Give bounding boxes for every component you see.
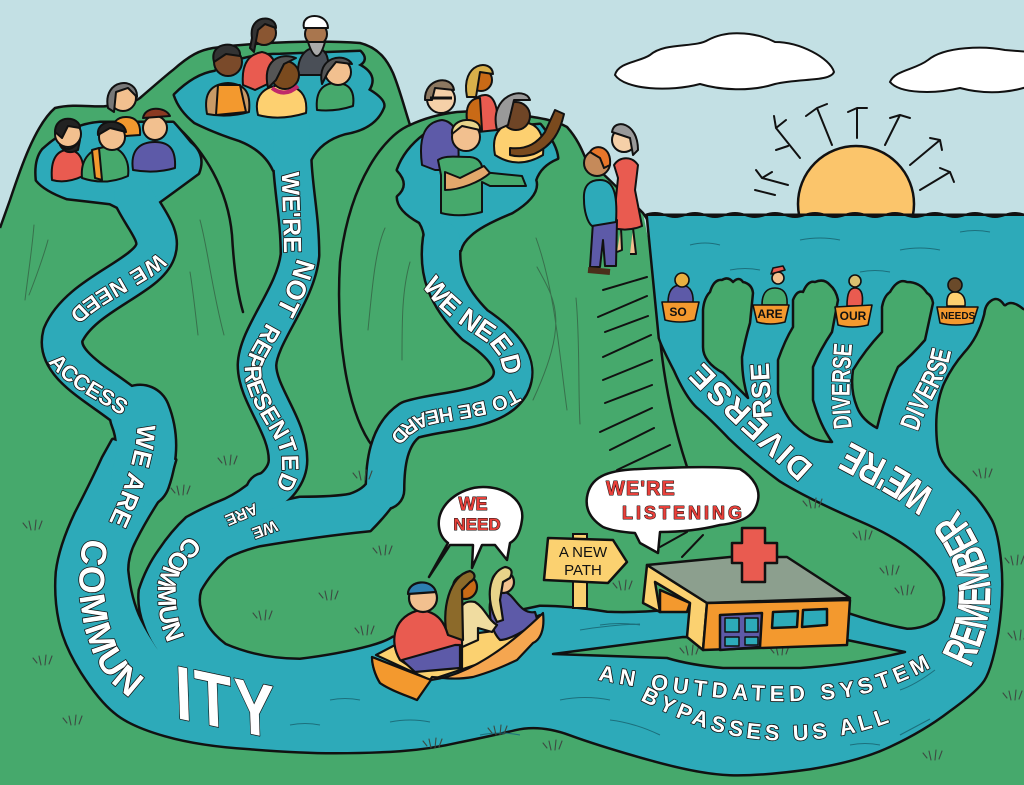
river text: we're not represented, we are community: WE (250, 520, 280, 540)
sun rays: raised-arm figures (755, 104, 954, 195)
river text: we need to be heard: TO BE HEARD (392, 390, 522, 444)
speech bubble: we need: NEED (453, 515, 501, 534)
ladder on cliff (598, 277, 703, 557)
sea sign labels (669, 305, 976, 323)
river text: remember we're diverse: DIVERSE (688, 362, 814, 482)
hill crease lines (25, 123, 580, 447)
finger labels: diverse: RSE (749, 362, 773, 418)
speech bubble: we need: WE (458, 494, 488, 514)
sea sign labels: NEEDS (941, 311, 976, 322)
sea sign labels: ARE (757, 307, 783, 321)
sea horizon wave (645, 213, 1024, 272)
clouds (615, 33, 1024, 92)
house island (553, 637, 905, 668)
speech bubble: we need (429, 487, 522, 577)
people: pool 3 (421, 65, 564, 215)
finger labels: diverse (749, 343, 952, 432)
clinic building (643, 528, 850, 650)
river text: we need access, we are community: WE ARE (108, 425, 156, 530)
river text: we're not represented, we are community: NOT (278, 258, 316, 320)
speech bubble: we're listening: LISTENING (622, 503, 745, 523)
outdated system text: BYPASSES US ALL (640, 686, 890, 742)
outdated system text: AN OUTDATED SYSTEM (598, 654, 930, 702)
river text: we're not represented, we are community: REPRESENTED (244, 323, 300, 492)
people: pool 2 (206, 16, 353, 118)
speech bubble: we're listening (587, 467, 758, 553)
river text: we need access, we are community (48, 254, 168, 698)
sea finger lobes (703, 278, 933, 442)
river text: we're not represented, we are community (156, 170, 316, 642)
river text: remember we're diverse (688, 362, 992, 667)
sea sign labels: OUR (840, 309, 867, 323)
river text: we need access, we are community: COMMUN (78, 540, 145, 698)
river text: remember we're diverse: REMEMBER (934, 509, 992, 667)
boat with three people (372, 567, 543, 700)
finger labels: diverse: DIVERSE (830, 343, 853, 430)
people: standing couple (584, 124, 642, 272)
grass tufts (23, 455, 1024, 760)
river text: we're not represented, we are community: WE'RE (281, 170, 302, 253)
river text: remember we're diverse: WE'RE (838, 442, 933, 516)
river text: we need to be heard: WE NEED (424, 273, 522, 374)
river ripples (290, 624, 935, 745)
finger labels: diverse: DIVERSE (899, 347, 952, 432)
sea sign labels: SO (669, 305, 687, 319)
speech bubble: we're listening: WE'RE (606, 478, 676, 500)
shared river text: ITY: ITY (174, 649, 279, 756)
people: sea figures and signs (662, 266, 978, 327)
people: pool 1 (52, 83, 175, 182)
river text: we're not represented, we are community: COMMUN (156, 538, 200, 642)
sun (796, 144, 916, 214)
signpost: a new path: PATH (564, 562, 602, 579)
river text: we're not represented, we are community: ARE (224, 502, 256, 527)
signpost: a new path: A NEW (559, 544, 608, 561)
outdated system text (598, 654, 930, 742)
river text: we need access, we are community: WE NEED (72, 254, 168, 322)
river text: we need to be heard (392, 273, 522, 444)
river text: we need access, we are community: ACCESS (48, 356, 128, 414)
signpost: a new path (544, 534, 627, 608)
